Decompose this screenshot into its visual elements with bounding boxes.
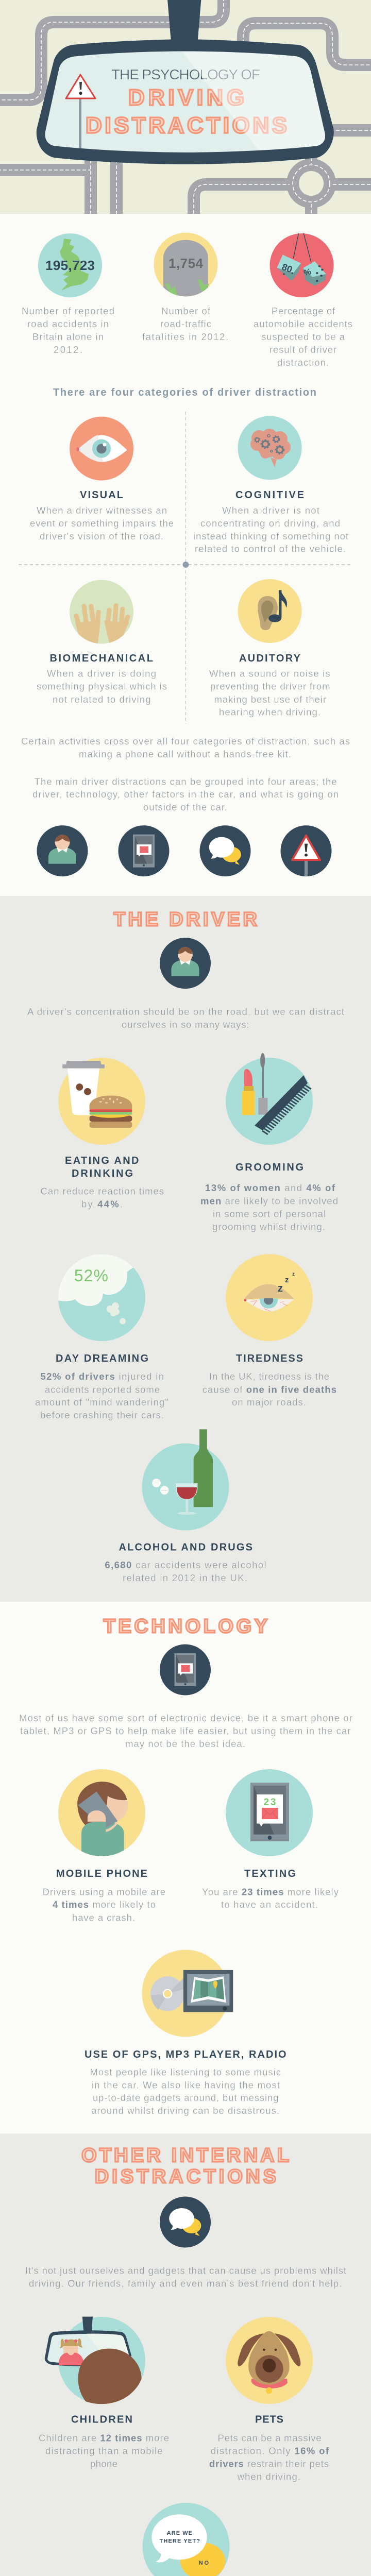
item: eating and drinking: DRINKING <box>72 1168 133 1179</box>
category: visual: event or something impairs the <box>30 518 174 529</box>
item: alcohol and drugs: related in 2012 in the UK. <box>123 1572 247 1583</box>
item: alcohol and drugs: ALCOHOL AND DRUGS <box>119 1542 252 1553</box>
icon: tired eye: z <box>285 1276 289 1284</box>
item: mobile phone <box>43 1769 165 1923</box>
item: GPS, MP3 player, radio: Most people like listening to some music <box>90 2067 281 2078</box>
item: mobile phone: have a crash. <box>72 1912 135 1923</box>
stat: distraction percentage with dice: automobile accidents <box>254 318 352 329</box>
category: visual: VISUAL <box>80 489 123 501</box>
heading: four categories: There are four categories of driver distraction <box>53 387 316 398</box>
category: biomechanical: not related to driving <box>53 694 150 705</box>
stat: reported road accidents: 195,723 <box>45 258 95 273</box>
section heading: OTHER INTERNAL <box>81 2145 289 2166</box>
icon: tired eye: z <box>292 1272 295 1277</box>
item: alcohol and drugs: 6,680 car accidents were alcohol <box>105 1560 266 1570</box>
icon: tired eye <box>244 1272 295 1311</box>
icon: thought cloud with 52%: 52% <box>74 1266 108 1285</box>
item: GPS, MP3 player, radio: around whilst driving can be disastrous. <box>91 2105 279 2116</box>
section heading: THE DRIVER <box>113 909 257 930</box>
intro text: tablet, MP3 or GPS to help make life easier, but using them in the car <box>20 1725 351 1736</box>
text block: four areas: outside of the car. <box>143 802 227 812</box>
icon: gravestone <box>163 240 209 302</box>
title <box>86 66 287 138</box>
intro text <box>27 1006 344 1030</box>
intro text: driving. Our friends, family and even man's best friend don't help. <box>29 2278 342 2289</box>
text block: crossover activities: Certain activities cross over all four categories of distraction, such as <box>21 736 350 747</box>
stat: distraction percentage with dice: 80 <box>280 262 294 275</box>
item: eating and drinking <box>40 1058 164 1210</box>
text block: crossover activities: making a phone call without a hands-free kit. <box>79 749 291 759</box>
icon: dog <box>238 2331 300 2394</box>
text block: four areas <box>32 776 339 812</box>
icon: driver <box>160 938 211 989</box>
icon row: four distraction areas <box>37 825 332 876</box>
item: day dreaming: amount of "mind wandering" <box>35 1397 168 1408</box>
category: cognitive: related to control of the vehicle. <box>195 543 346 554</box>
title: DISTRACTIONS <box>86 113 287 138</box>
stat: distraction percentage with dice: % <box>303 267 312 278</box>
item: children: Children are 12 times more <box>39 2433 169 2443</box>
title: THE PSYCHOLOGY OF <box>111 66 260 82</box>
item: grooming <box>200 1053 338 1232</box>
category: cognitive: concentrating on driving, and <box>200 518 340 529</box>
stat: road-traffic fatalities: 1,754 <box>168 256 204 271</box>
stat: reported road accidents: road accidents in <box>27 318 109 329</box>
category: auditory: AUDITORY <box>239 653 301 664</box>
icon: phone <box>119 825 169 876</box>
stat: road-traffic fatalities: Number of <box>161 306 211 316</box>
item: GPS, MP3 player, radio: up-to-date gadgets around, but messing <box>93 2092 278 2103</box>
icon: person on phone <box>77 1782 128 1856</box>
road network map <box>0 0 371 214</box>
icon: phone with 23 messages <box>250 1783 289 1841</box>
icon: CD and GPS map <box>150 1970 233 2012</box>
panel: header with road map and rear-view mirror <box>0 0 371 214</box>
item: tiredness: TIREDNESS <box>236 1353 303 1364</box>
item: day dreaming <box>35 1246 168 1420</box>
item: mobile phone: MOBILE PHONE <box>56 1868 147 1879</box>
category: auditory <box>209 579 330 718</box>
item: eating and drinking: Can reduce reaction times <box>40 1186 164 1196</box>
intro text: It's not just ourselves and gadgets that can cause us problems whilst <box>25 2265 346 2276</box>
category: cognitive: instead thinking of something not <box>193 531 348 541</box>
category: cognitive: When a driver is not <box>222 505 319 516</box>
item: passenger conversation <box>80 2503 293 2576</box>
category: biomechanical: something physical which is <box>37 681 167 691</box>
intro text: Most of us have some sort of electronic device, be it a smart phone or <box>19 1713 352 1723</box>
icon: conversation bubbles: THERE YET? <box>160 2538 200 2544</box>
icon: eye <box>76 435 127 462</box>
item: texting: You are 23 times more likely <box>202 1887 339 1897</box>
section heading <box>81 2145 289 2188</box>
title: DRIVING <box>128 85 244 110</box>
item: pets: drivers restrain their pets <box>209 2459 329 2469</box>
icon: warning sign <box>280 825 332 876</box>
item: day dreaming: before crashing their cars. <box>40 1410 164 1420</box>
category: cognitive <box>193 416 348 554</box>
category: auditory: When a sound or noise is <box>209 668 330 679</box>
item: grooming: GROOMING <box>235 1162 303 1173</box>
intro text: A driver's concentration should be on the road, but we can distract <box>27 1006 344 1017</box>
intro text <box>19 1713 352 1749</box>
item: texting: to have an accident. <box>221 1899 318 1910</box>
item: tiredness <box>203 1254 336 1408</box>
icon: conversation bubbles: NO <box>199 2560 209 2566</box>
item: children: CHILDREN <box>71 2414 132 2426</box>
icon: coffee and burger <box>62 1061 132 1128</box>
item: GPS, MP3 player, radio: USE OF GPS, MP3 PLAYER, RADIO <box>85 2049 286 2060</box>
stat: distraction percentage with dice: Percentage of <box>272 306 335 316</box>
text block: four areas: driver, technology, other factors in the car, and what is going on <box>32 789 339 800</box>
stat: reported road accidents: 2012. <box>54 344 82 355</box>
icon: conversation bubbles: ARE WE <box>167 2530 192 2536</box>
item: day dreaming: 52% of drivers injured in <box>40 1371 164 1382</box>
panel: other internal distractions <box>0 2134 371 2576</box>
panel: the driver <box>0 896 371 1602</box>
icon: brain with gears <box>250 429 291 467</box>
icon: warning sign in mirror <box>66 75 95 148</box>
item: mobile phone: Drivers using a mobile are <box>43 1887 165 1897</box>
icon: conversation bubbles <box>151 2514 225 2576</box>
quadrant divider <box>19 412 352 724</box>
icon: tired eye: z <box>278 1283 283 1294</box>
icon: thought cloud with 52% <box>58 1254 133 1324</box>
icon: map of Britain <box>60 239 89 291</box>
icon: hanging dice <box>277 233 326 286</box>
stat: reported road accidents: Britain alone in <box>32 331 104 342</box>
category: auditory: preventing the driver from <box>210 681 330 691</box>
item: mobile phone: 4 times more likely to <box>53 1899 156 1910</box>
item: children: phone <box>90 2459 117 2469</box>
intro text: may not be the best idea. <box>125 1738 245 1749</box>
item: grooming: 13% of women and 4% of <box>205 1182 335 1193</box>
icon: speech bubbles <box>200 825 250 876</box>
category: visual: driver's vision of the road. <box>40 531 163 541</box>
item: grooming: grooming whilst driving. <box>212 1221 325 1232</box>
item: day dreaming: DAY DREAMING <box>56 1353 148 1364</box>
icon: driver <box>37 825 88 876</box>
icon: child in rear-view mirror <box>45 2317 142 2404</box>
intro text <box>25 2265 346 2289</box>
stat: reported road accidents <box>22 233 114 355</box>
item: grooming: in some sort of personal <box>213 1209 326 1219</box>
item: texting: TEXTING <box>244 1868 296 1879</box>
item: tiredness: In the UK, tiredness is the <box>209 1371 329 1382</box>
stat: distraction percentage with dice: suspected to be a <box>261 331 345 342</box>
item: alcohol and drugs <box>105 1429 266 1583</box>
category: visual <box>30 417 174 541</box>
item: GPS, MP3 player, radio <box>85 1950 286 2116</box>
item: pets <box>209 2317 329 2482</box>
category: biomechanical: BIOMECHANICAL <box>49 653 153 664</box>
panel: technology <box>19 1616 352 2116</box>
stat: road-traffic fatalities: fatalities in 2012. <box>142 331 228 342</box>
stat: reported road accidents: Number of reported <box>22 306 114 316</box>
item: pets: when driving. <box>237 2471 300 2482</box>
category: biomechanical: When a driver is doing <box>47 668 156 679</box>
item: tiredness: cause of one in five deaths <box>203 1384 336 1395</box>
category: biomechanical <box>37 580 167 705</box>
item: eating and drinking: EATING AND <box>65 1155 139 1166</box>
text block: four areas: The main driver distractions can be grouped into four areas; the <box>35 776 337 787</box>
icon: lipstick, mascara and comb <box>242 1053 309 1133</box>
item: children: distracting than a mobile <box>45 2445 163 2456</box>
item: day dreaming: accidents reported some <box>45 1384 160 1395</box>
intro text: ourselves in so many ways: <box>122 1019 249 1030</box>
category: auditory: making best use of their <box>214 694 326 705</box>
item: tiredness: on major roads. <box>232 1397 306 1408</box>
section heading: TECHNOLOGY <box>104 1616 267 1637</box>
rear-view mirror with title <box>37 0 334 164</box>
category: auditory: hearing when driving. <box>219 707 321 718</box>
icon: wine bottle, glass and pills <box>152 1429 213 1515</box>
category: cognitive: COGNITIVE <box>235 489 304 501</box>
icon: speech bubbles <box>160 2197 211 2247</box>
stat: road-traffic fatalities <box>142 233 228 342</box>
stat: distraction percentage with dice: distraction. <box>277 357 329 368</box>
item: eating and drinking: by 44%. <box>81 1198 123 1210</box>
item: children <box>39 2317 169 2469</box>
icon: phone <box>160 1645 211 1695</box>
icon: phone with 23 messages: 23 <box>264 1797 276 1808</box>
icon: raised hands <box>75 605 129 646</box>
stat: road-traffic fatalities: road-traffic <box>160 318 211 329</box>
text block: crossover activities <box>21 736 350 759</box>
icon: ear and music note <box>258 590 287 630</box>
stat: distraction percentage with dice: result of driver <box>269 344 336 355</box>
item: pets: PETS <box>255 2414 283 2426</box>
item: grooming: men are likely to be involved <box>200 1196 338 1207</box>
section heading: DISTRACTIONS <box>95 2166 276 2188</box>
item: GPS, MP3 player, radio: in the car. We also like having the most <box>92 2079 280 2091</box>
category: visual: When a driver witnesses an <box>37 505 167 516</box>
item: texting <box>202 1769 339 1910</box>
item: pets: Pets can be a massive <box>217 2433 322 2443</box>
stat: distraction percentage with dice <box>254 233 352 368</box>
item: pets: distraction. Only 16% of <box>211 2445 329 2456</box>
